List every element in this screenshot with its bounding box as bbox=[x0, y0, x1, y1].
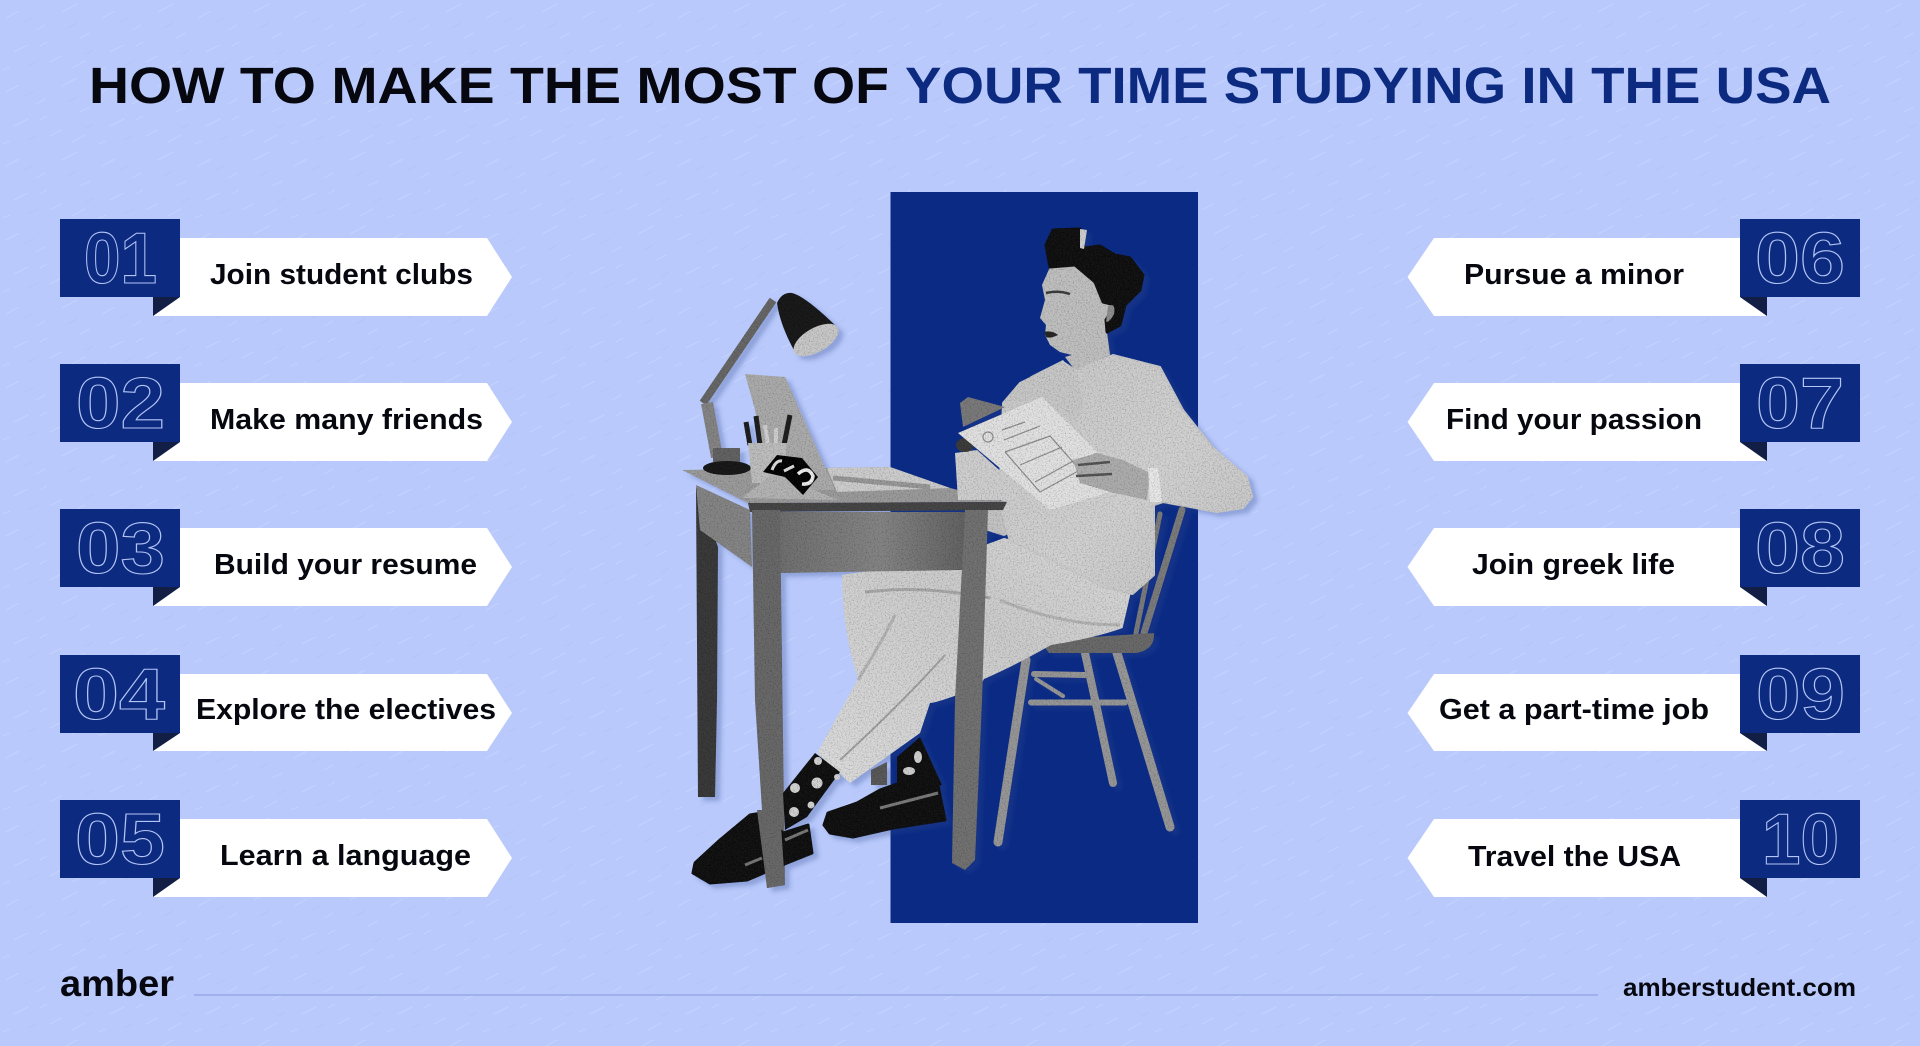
item 09: 09 bbox=[1756, 655, 1845, 735]
laptop bbox=[745, 374, 950, 492]
item 07: Find your passion bbox=[1446, 404, 1702, 436]
item 10: 10 bbox=[1762, 800, 1839, 880]
item 01: Join student clubs bbox=[210, 259, 473, 291]
item 07 bbox=[1408, 364, 1860, 461]
item 01: 01 bbox=[84, 219, 157, 299]
item 06: 06 bbox=[1755, 219, 1845, 299]
item 05: Learn a language bbox=[220, 840, 471, 872]
title: HOW TO MAKE THE MOST OF bbox=[89, 57, 889, 114]
item 04 bbox=[60, 655, 512, 751]
lamp bbox=[703, 293, 844, 475]
item 02 bbox=[60, 364, 512, 461]
item 08: 08 bbox=[1755, 509, 1845, 589]
back stretcher stub bbox=[871, 762, 887, 785]
item 06 bbox=[1408, 219, 1860, 316]
website: amberstudent.com bbox=[1623, 974, 1856, 1002]
item 03: 03 bbox=[76, 509, 165, 589]
chair bbox=[998, 457, 1190, 842]
item 08: Join greek life bbox=[1472, 549, 1675, 581]
item 05 bbox=[60, 800, 512, 897]
desk bbox=[682, 467, 1007, 888]
item 02: Make many friends bbox=[210, 404, 483, 436]
pen cup bbox=[746, 415, 790, 483]
item 10: Travel the USA bbox=[1468, 841, 1681, 873]
item 09: Get a part-time job bbox=[1439, 694, 1709, 726]
left elbow bbox=[985, 498, 1027, 536]
item 04: 04 bbox=[73, 655, 165, 735]
far leg sock and shoe bbox=[824, 737, 945, 837]
title bbox=[89, 57, 1831, 114]
title: YOUR TIME STUDYING IN THE USA bbox=[905, 57, 1831, 114]
item 02: 02 bbox=[76, 364, 165, 444]
item 08 bbox=[1408, 509, 1860, 606]
footer rule bbox=[194, 994, 1598, 996]
illustration: student at desk bbox=[682, 229, 1252, 888]
item 03 bbox=[60, 509, 512, 606]
item 10 bbox=[1408, 800, 1860, 897]
sweater bbox=[1000, 355, 1252, 594]
item 09 bbox=[1408, 655, 1860, 751]
trousers bbox=[817, 538, 1132, 783]
blue backdrop panel bbox=[890, 192, 1198, 923]
item 07: 07 bbox=[1756, 364, 1844, 444]
near leg sock and shoe bbox=[693, 753, 840, 888]
item 03: Build your resume bbox=[214, 549, 477, 581]
logo: amber: amber bbox=[60, 963, 174, 1004]
card with stickers bbox=[742, 455, 838, 500]
item 05: 05 bbox=[75, 800, 165, 880]
item 04: Explore the electives bbox=[196, 694, 496, 726]
item 01 bbox=[60, 219, 512, 316]
head bbox=[1040, 229, 1143, 370]
forearm and document bbox=[955, 360, 1162, 510]
item 06: Pursue a minor bbox=[1464, 259, 1684, 291]
